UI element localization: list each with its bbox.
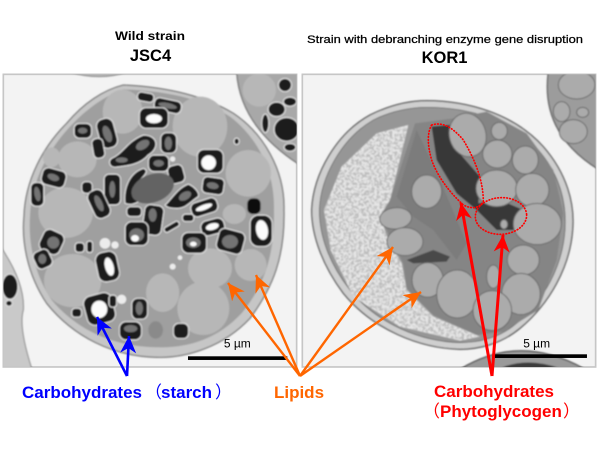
scale bar: KOR1 bbox=[495, 336, 587, 358]
cell: JSC4 body bbox=[23, 85, 284, 357]
heading: disruption strain: Strain with debranching enzyme gene disruption bbox=[307, 34, 583, 46]
label: phytoglycogen: ） bbox=[563, 402, 580, 421]
heading: disruption strain bbox=[307, 34, 583, 67]
cell: KOR1 body bbox=[312, 101, 573, 349]
lipid droplets bbox=[379, 109, 561, 331]
scale bar: JSC4: 5 µm bbox=[224, 336, 251, 350]
dotted outline: phytoglycogen region 1 bbox=[428, 124, 483, 208]
panel: JSC4 micrograph bbox=[2, 72, 300, 368]
label: phytoglycogen: （ bbox=[423, 402, 440, 421]
label: phytoglycogen: Phytoglycogen bbox=[440, 402, 562, 421]
dotted outline: phytoglycogen region 2 bbox=[474, 196, 528, 236]
heading: wild strain: JSC4 bbox=[130, 47, 172, 65]
heading: wild strain bbox=[115, 29, 185, 65]
arrows: lipids bbox=[228, 247, 421, 376]
label: phytoglycogen: Carbohydrates bbox=[434, 382, 554, 401]
scale bar: JSC4 bbox=[188, 336, 287, 360]
label: starch: Carbohydrates bbox=[22, 383, 142, 402]
chloroplast bbox=[380, 112, 563, 335]
heading: disruption strain: KOR1 bbox=[422, 49, 467, 67]
nucleus bbox=[130, 172, 174, 204]
speckled cytoplasm bbox=[324, 125, 480, 341]
heading: wild strain: Wild strain bbox=[115, 29, 185, 43]
panel: KOR1 micrograph bbox=[302, 71, 598, 368]
label: starch: starch bbox=[161, 383, 212, 402]
vesicles bbox=[100, 156, 182, 304]
scale bar: KOR1: 5 µm bbox=[523, 336, 550, 350]
neighbouring cells bbox=[462, 71, 598, 368]
arrows: phytoglycogen bbox=[461, 203, 503, 376]
label: starch: ） bbox=[215, 383, 232, 402]
lipid droplets bbox=[38, 90, 271, 335]
arrows: starch bbox=[97, 317, 129, 376]
starch granules bbox=[31, 91, 272, 340]
label: starch: （ bbox=[145, 383, 162, 402]
label: lipids: Lipids bbox=[274, 383, 324, 402]
phytoglycogen dark area bbox=[432, 125, 523, 230]
lamellae bbox=[397, 130, 467, 260]
cell interior bbox=[30, 89, 274, 347]
label: phytoglycogen bbox=[423, 382, 580, 421]
neighbouring cells bbox=[2, 72, 300, 368]
cell interior bbox=[319, 107, 565, 343]
